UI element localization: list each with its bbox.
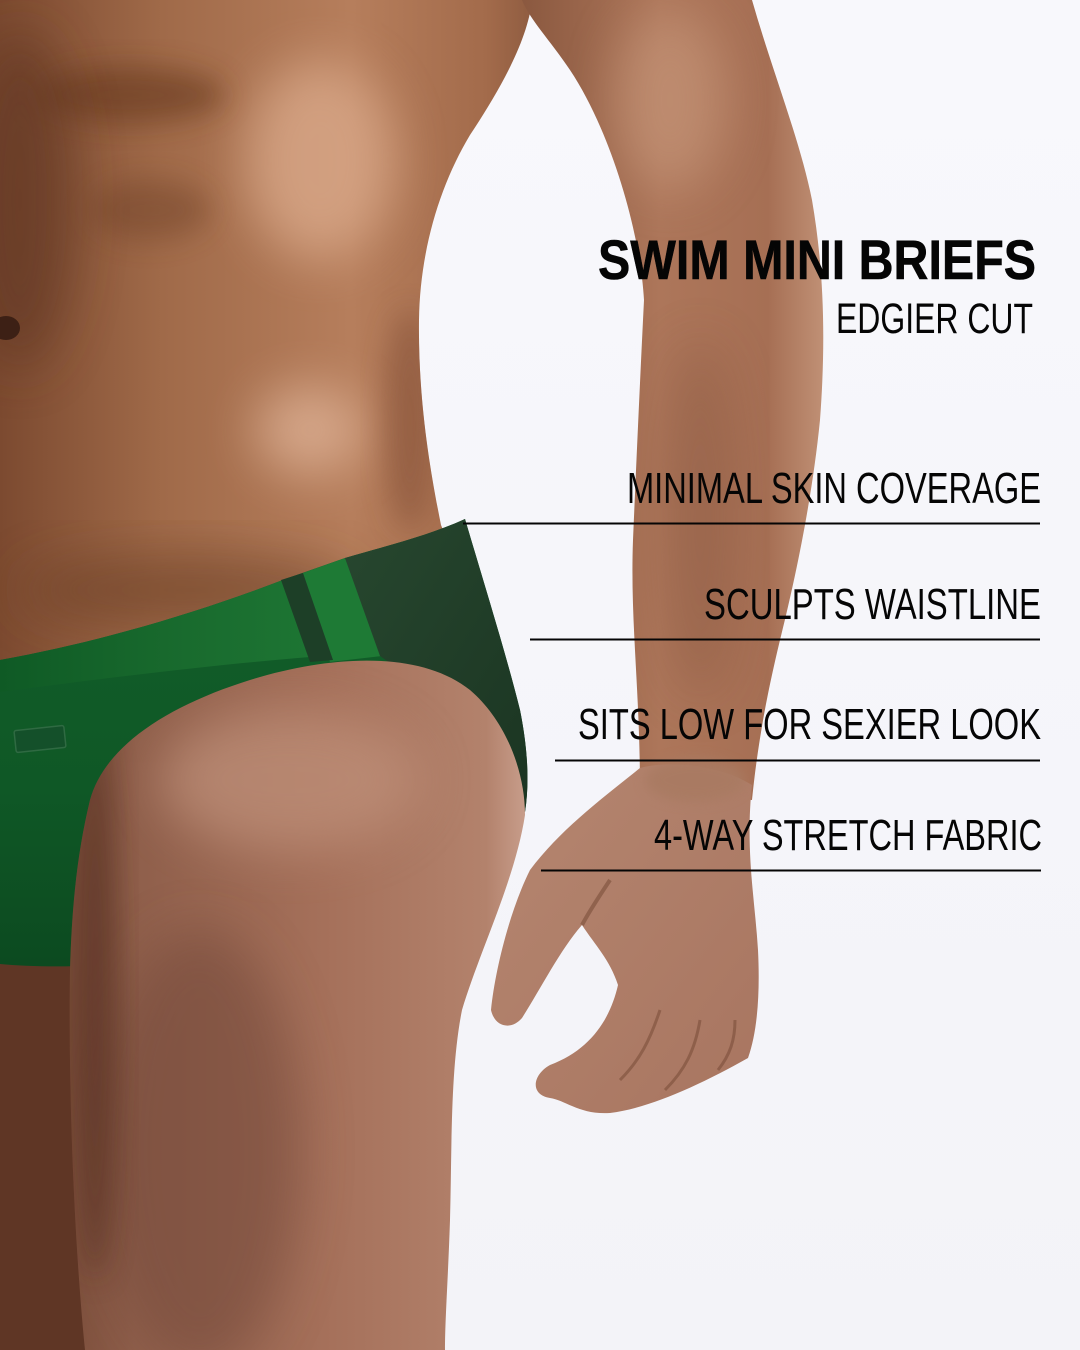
green stripe	[300, 558, 382, 662]
hand	[491, 764, 759, 1113]
logo label	[14, 725, 66, 753]
thigh	[70, 660, 525, 1350]
torso	[0, 0, 530, 660]
photo: model in green swim briefs	[0, 0, 830, 1350]
briefs front panel	[0, 519, 527, 966]
left inner thigh	[0, 950, 90, 1350]
dark side panel	[345, 519, 527, 812]
dark stripe	[281, 573, 333, 662]
swim briefs	[0, 519, 527, 966]
waistband	[0, 578, 310, 692]
navel	[0, 316, 20, 340]
arm	[520, 0, 830, 800]
